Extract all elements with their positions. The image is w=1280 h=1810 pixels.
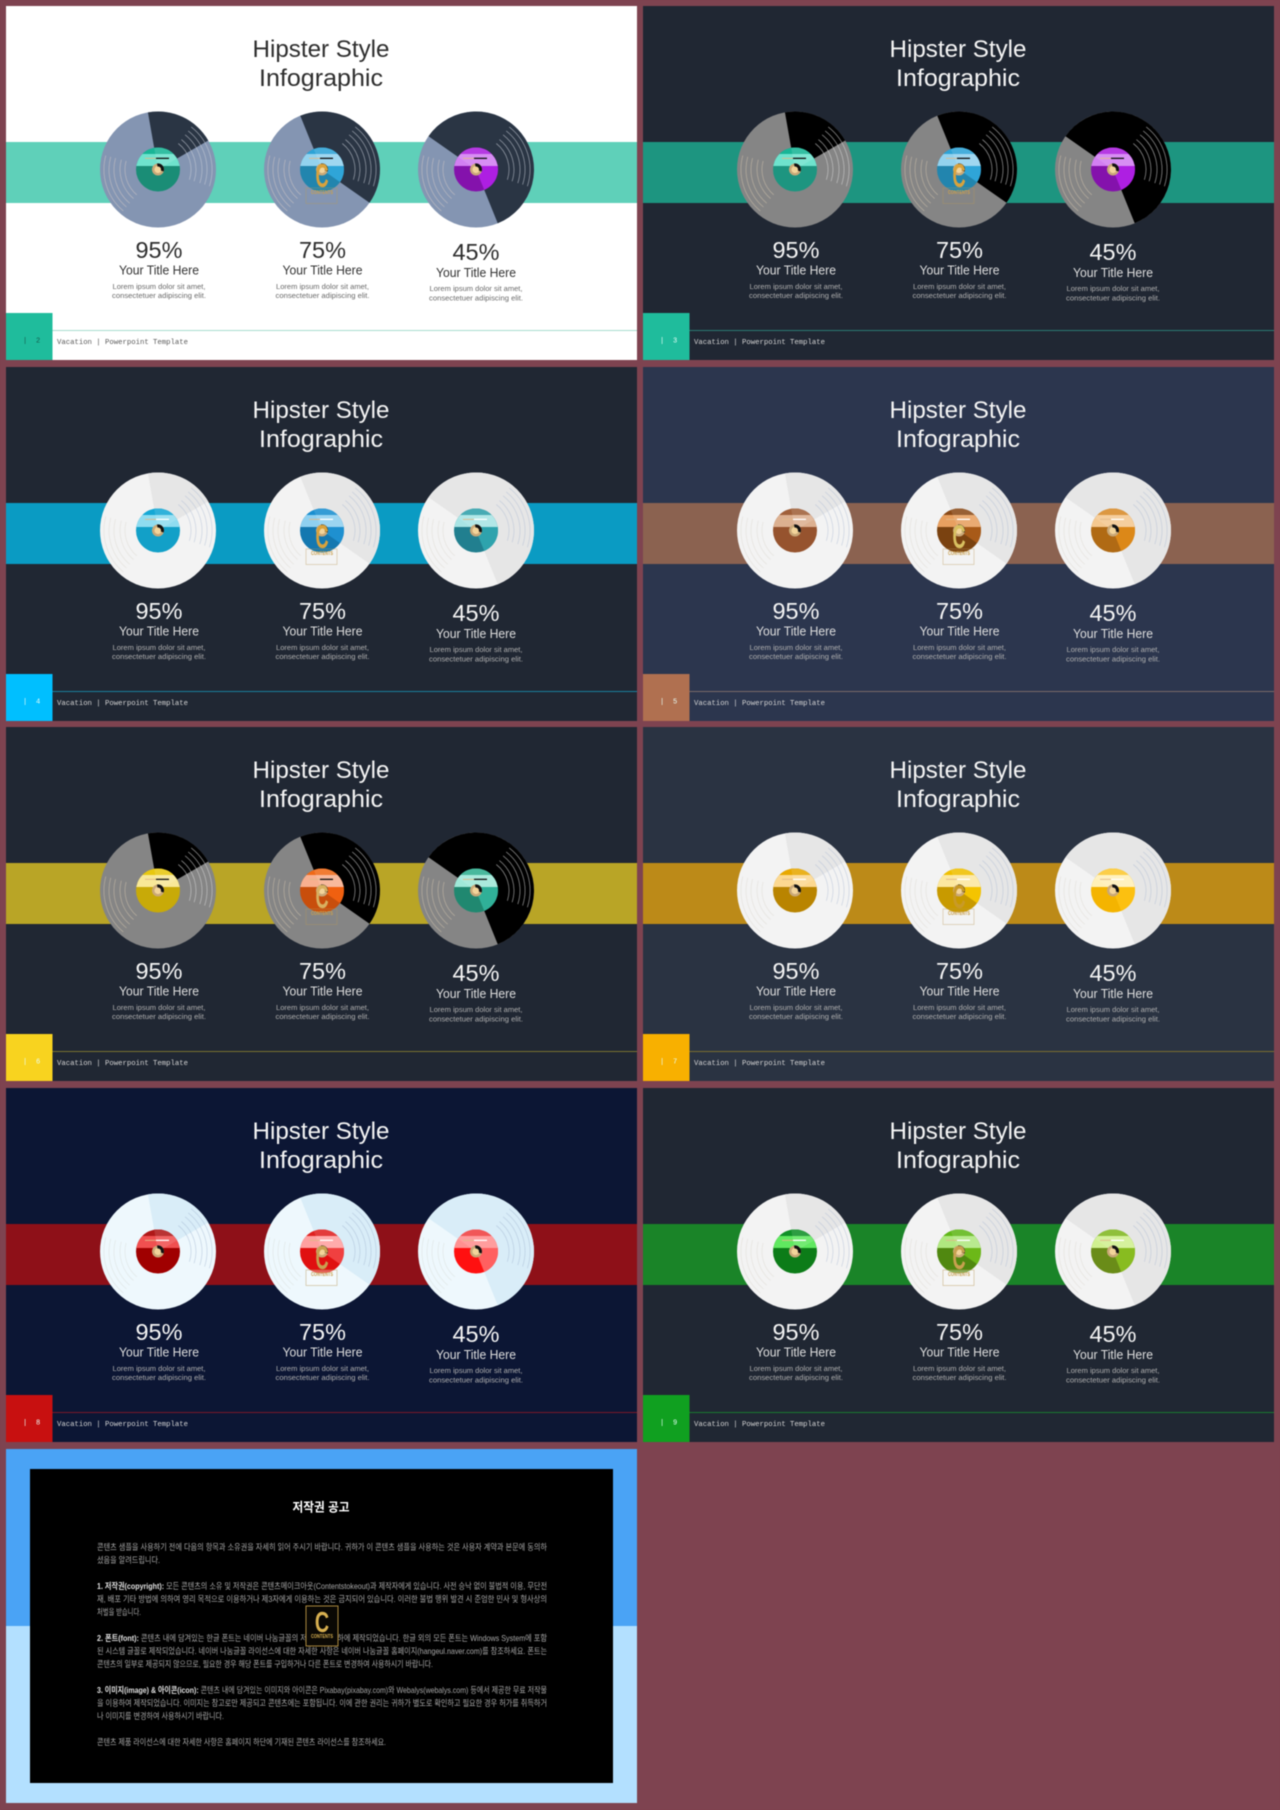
watermark logo [306,157,337,204]
stat: 95%: consectetuer adipiscing elit. [749,1373,843,1382]
colour band [643,1224,1274,1285]
stat: 45%: 45% [1090,239,1137,265]
stat: 75%: Your Title Here [282,984,362,998]
heading: Hipster Style [252,36,390,63]
stat: 45%: 45% [1090,1321,1137,1347]
panel: dark slide with olive band, page 6 [6,727,637,1081]
heading: Infographic [259,65,383,92]
watermark logo: CONTENTS [948,911,971,917]
stat: 45%: 45% [452,960,500,986]
stat: 45%: Lorem ipsum dolor sit amet, [1066,645,1160,654]
watermark logo: C [315,157,329,194]
stat: 45%: consectetuer adipiscing elit. [429,1375,523,1384]
page number square: | [23,338,27,346]
stat: 45%: 45% [1090,960,1137,986]
stat: 75%: consectetuer adipiscing elit. [912,1012,1006,1021]
stat: 45%: Your Title Here [1073,1347,1153,1362]
page number square: 2 [36,338,40,346]
vinyl record: 75% [901,1193,1017,1310]
watermark logo: C [315,1607,329,1639]
page number square [643,313,690,360]
watermark logo: C [952,878,966,915]
stat: 95%: Lorem ipsum dolor sit amet, [750,643,842,652]
stat: 45%: Lorem ipsum dolor sit amet, [430,1366,522,1375]
stat: 75% [276,237,370,300]
footer line [52,330,637,331]
stat: 75%: Your Title Here [282,624,362,638]
panel: slate slide with amber band, page 7 [643,727,1274,1081]
stat: 45%: 45% [452,600,500,626]
page number square [643,674,690,721]
vinyl record: 95% [737,1193,853,1310]
vinyl record: 75% [264,472,380,588]
stat: 45%: Lorem ipsum dolor sit amet, [430,284,522,293]
colour band [6,142,637,203]
stat: 45%: Your Title Here [1073,986,1153,1001]
heading: Hipster Style [890,397,1026,424]
vinyl record: 45% [1055,1194,1171,1310]
footer line [689,1051,1274,1052]
stat: 45%: Lorem ipsum dolor sit amet, [430,645,522,654]
notice body text: 3. 이미지(image) & 아이콘(icon): 콘텐츠 내에 담겨있는 이미지와 아이콘은 Pixabay(pixabay.com)와 Webalys(webalys.com) 등에서 제공한 무료 저작물 [97,1685,547,1695]
stat: 75%: consectetuer adipiscing elit. [276,652,370,661]
stat: 75%: Lorem ipsum dolor sit amet, [913,643,1006,652]
stat: 95%: Lorem ipsum dolor sit amet, [750,1003,842,1012]
vinyl record: 45% [1055,472,1171,588]
watermark logo: C [315,1239,329,1276]
stat: 95%: 95% [772,598,820,624]
page number square: 3 [673,338,677,346]
black notice card [30,1469,613,1783]
stat: 45%: consectetuer adipiscing elit. [1066,293,1160,302]
stat: 75%: Lorem ipsum dolor sit amet, [913,1003,1006,1012]
vinyl record: 75% [264,1193,380,1310]
stat: 45%: consectetuer adipiscing elit. [1066,1014,1160,1023]
stat: 75%: 75% [299,237,346,263]
watermark logo: CONTENTS [948,551,971,557]
stat: 45%: consectetuer adipiscing elit. [1066,654,1160,663]
heading [890,397,1026,453]
stat: 45%: 45% [452,239,500,265]
notice body text: 셨음을 알려드립니다. [97,1555,160,1565]
stat: 95% [112,958,206,1021]
stat: 95%: Lorem ipsum dolor sit amet, [112,1364,206,1373]
vinyl record: 75% [901,111,1017,228]
stat: 75%: Your Title Here [282,1344,362,1360]
footer text: Vacation | Powerpoint Template [57,339,188,347]
page number square [643,1034,690,1081]
watermark logo [943,157,974,204]
vinyl record: 95% [737,111,853,228]
footer text: Vacation | Powerpoint Template [694,1421,825,1429]
footer text: Vacation | Powerpoint Template [694,700,825,708]
heading [890,757,1026,813]
stat: 45% [1066,960,1160,1023]
panel: dark slide with teal band, page 3 [643,6,1274,360]
watermark logo: CONTENTS [311,1634,333,1640]
footer text: Vacation | Powerpoint Template [57,700,188,708]
stat: 95%: Your Title Here [756,262,836,278]
stat: 95%: Your Title Here [119,262,199,278]
stat: 95%: Lorem ipsum dolor sit amet, [750,282,842,291]
stat: 75%: Your Title Here [920,984,1000,998]
stat: 95%: 95% [136,598,183,624]
colour band [643,503,1274,564]
stat: 45%: consectetuer adipiscing elit. [429,654,523,663]
vinyl record: 95% [737,832,853,948]
page number square [643,1395,690,1442]
vinyl record: 95% [100,111,216,228]
vinyl record: 45% [418,472,534,588]
panel: dark slide with green band, page 9 [643,1088,1274,1442]
watermark logo: CONTENTS [311,551,334,557]
heading [252,397,390,453]
vinyl record: 95% [100,832,216,948]
watermark logo: C [952,1239,966,1276]
page number square: | [23,1420,27,1428]
stat: 75% [912,1319,1006,1382]
heading: Infographic [896,426,1020,453]
watermark logo [943,1239,974,1286]
vinyl record: 95% [100,1193,216,1310]
stat: 75%: Your Title Here [282,262,362,278]
footer line [689,691,1274,692]
stat: 95% [112,237,206,300]
heading [252,1118,390,1174]
stat: 95%: Lorem ipsum dolor sit amet, [112,643,206,652]
stat: 95%: consectetuer adipiscing elit. [749,291,843,300]
stat: 95%: consectetuer adipiscing elit. [112,1012,206,1021]
stat: 75%: 75% [936,237,983,263]
heading: Infographic [896,65,1020,92]
page number square: | [660,1058,664,1066]
stat: 75%: Your Title Here [920,262,1000,278]
panel: dark slide with blue band, page 4 [6,367,637,721]
vinyl record: 75% [901,472,1017,588]
stat: 45%: Your Title Here [1073,265,1153,280]
stat: 75%: 75% [299,1319,346,1345]
watermark logo: C [952,157,966,194]
heading: Infographic [259,786,383,813]
stat: 45%: consectetuer adipiscing elit. [1066,1375,1160,1384]
colour band [6,863,637,924]
heading [890,36,1026,92]
page number square: 6 [36,1058,40,1066]
footer line [52,1412,637,1413]
heading [890,1118,1026,1174]
stat: 75%: Lorem ipsum dolor sit amet, [276,1364,369,1373]
stat: 95%: consectetuer adipiscing elit. [749,652,843,661]
footer text: Vacation | Powerpoint Template [57,1421,188,1429]
stat: 45%: Your Title Here [436,265,516,280]
page number square: 7 [673,1058,677,1066]
heading: Infographic [259,426,383,453]
watermark logo [306,1606,338,1646]
panel: copyright notice [6,1449,637,1803]
panel: white slide, page 2 [6,6,637,360]
footer line [689,1412,1274,1413]
footer text: Vacation | Powerpoint Template [57,1060,188,1068]
stat: 95%: Your Title Here [119,1344,199,1360]
notice body text: 콘텐츠 샘플을 사용하기 전에 다음의 항목과 소유권을 자세히 읽어 주시기 바랍니다. 귀하가 이 콘텐츠 샘플을 사용하는 것은 사용자 계약과 본문에 동의하 [97,1542,547,1552]
vinyl record: 45% [1055,112,1171,228]
stat: 95%: consectetuer adipiscing elit. [749,1012,843,1021]
stat: 95%: Your Title Here [756,984,836,998]
stat: 75%: consectetuer adipiscing elit. [912,1373,1006,1382]
colour band [643,863,1274,924]
stat: 75%: consectetuer adipiscing elit. [912,291,1006,300]
stat: 95%: 95% [136,958,183,984]
stat: 45% [429,960,523,1023]
heading: Hipster Style [252,757,390,784]
stat: 75% [912,598,1006,661]
watermark logo [306,878,337,924]
notice body text: 처벌을 받습니다. [97,1607,141,1617]
vinyl record: 45% [418,1194,534,1310]
footer text: Vacation | Powerpoint Template [694,339,825,347]
page number square [6,674,52,721]
stat: 75%: consectetuer adipiscing elit. [276,291,370,300]
page number square [6,1395,52,1442]
vinyl record: 95% [100,472,216,588]
notice body text: 나 이미지를 변경하여 사용하시기 바랍니다. [97,1711,224,1721]
stat: 45%: Lorem ipsum dolor sit amet, [1066,284,1160,293]
vinyl record: 45% [418,112,534,228]
stat: 75%: Your Title Here [920,1344,1000,1360]
stat: 95%: 95% [772,1319,820,1345]
stat: 75% [912,958,1006,1021]
vinyl record: 95% [737,472,853,588]
page number square: | [660,338,664,346]
colour band [6,1224,637,1285]
footer line [52,1051,637,1052]
stat: 75%: Lorem ipsum dolor sit amet, [913,282,1006,291]
stat: 95%: consectetuer adipiscing elit. [112,291,206,300]
stat: 75%: 75% [936,598,983,624]
notice body text [97,1542,547,1747]
stat: 95% [112,1319,206,1382]
footer text: Vacation | Powerpoint Template [694,1060,825,1068]
stat: 75%: 75% [936,1319,983,1345]
page number square: | [23,1058,27,1066]
stat: 75% [912,237,1006,300]
stat: 75%: 75% [936,958,983,984]
footer line [52,691,637,692]
stat: 75%: consectetuer adipiscing elit. [276,1373,370,1382]
stat: 75%: 75% [299,958,346,984]
heading [252,757,390,813]
stat: 75%: Lorem ipsum dolor sit amet, [913,1364,1006,1373]
colour band [6,503,637,564]
stat: 75%: Lorem ipsum dolor sit amet, [276,643,369,652]
stat: 45%: consectetuer adipiscing elit. [429,293,523,302]
stat: 75%: consectetuer adipiscing elit. [912,652,1006,661]
stat: 95%: 95% [772,958,820,984]
watermark logo [943,518,974,564]
colour band [643,142,1274,203]
page number square: 9 [673,1420,677,1428]
notice body text: 콘텐츠 제품 라이선스에 대한 자세한 사항은 홈페이지 하단에 기재된 콘텐츠 라이선스를 참조하세요. [97,1737,386,1747]
stat: 75%: consectetuer adipiscing elit. [276,1012,370,1021]
watermark logo [306,518,337,564]
stat: 95%: Lorem ipsum dolor sit amet, [112,1003,206,1012]
page number square: 5 [673,698,677,706]
notice body text: 된 시스템 글꼴로 제작되었습니다. 네이버 나눔글꼴 라이선스에 대한 자세한 사항은 네이버 나눔글꼴 홈페이지(hangeul.naver.com)를 참조하세요. 폰트는 [97,1646,547,1656]
notice body text: 콘텐츠의 일부로 제공되지 않으므로, 필요한 경우 해당 폰트를 구입하거나 다른 폰트로 변경하여 사용하시기 바랍니다. [97,1659,433,1669]
stat: 45%: Your Title Here [436,626,516,641]
notice heading: 저작권 공고 [292,1500,350,1514]
heading: Infographic [896,1147,1020,1174]
stat: 45% [1066,239,1160,302]
panel: midnight slide with red band, page 8 [6,1088,637,1442]
watermark logo: CONTENTS [311,1272,334,1278]
stat: 45%: Your Title Here [436,1347,516,1362]
vinyl record: 45% [418,832,534,948]
stat: 75%: Your Title Here [920,624,1000,638]
notice body text: 을 이용하여 제작되었습니다. 이미지는 참고로만 제공되고 콘텐츠에는 포함됩니다. 이에 관한 권리는 귀하가 별도로 확인하고 필요한 경우 허가를 취득하거 [97,1698,547,1708]
notice body text: 2. 폰트(font): 콘텐츠 내에 담겨있는 한글 폰트는 네이버 나눔글꼴의 저작권 허락 하에 제작되었습니다. 한글 외의 모든 폰트는 Windows System에 포함 [97,1633,547,1643]
page number square [6,313,52,360]
page number square: | [660,1420,664,1428]
page number square [6,1034,52,1081]
stat: 75% [276,958,370,1021]
stat: 45%: Lorem ipsum dolor sit amet, [1066,1366,1160,1375]
stat: 95% [749,1319,843,1382]
stat: 95%: Your Title Here [119,624,199,638]
stat: 95%: Lorem ipsum dolor sit amet, [112,282,206,291]
heading: Hipster Style [890,1118,1026,1145]
page number square: | [23,698,27,706]
page number square: | [660,698,664,706]
page number square: 4 [36,698,40,706]
footer line [689,330,1274,331]
stat: 75%: 75% [299,598,346,624]
vinyl record: 45% [1055,832,1171,948]
stat: 95%: Your Title Here [756,624,836,638]
stat: 95%: Your Title Here [756,1344,836,1360]
stat: 75%: Lorem ipsum dolor sit amet, [276,282,369,291]
vinyl record: 75% [264,111,380,228]
stat: 95%: 95% [136,1319,183,1345]
watermark logo: C [315,518,329,555]
notice body text: 재, 배포 기타 방법에 의하여 영리 목적으로 이용하거나 제3자에게 이용하는 것은 금지되어 있습니다. 이러한 불법 행위 발견 시 준엄한 민사 및 형사상의 [97,1594,547,1604]
stat: 45% [429,600,523,663]
heading: Infographic [259,1147,383,1174]
stat: 45% [429,239,523,302]
vinyl record: 75% [264,832,380,948]
heading: Hipster Style [890,757,1026,784]
stat: 95%: 95% [772,237,820,263]
stat: 45% [1066,600,1160,663]
watermark logo: CONTENTS [311,911,334,917]
heading: Hipster Style [890,36,1026,63]
stat: 75%: Lorem ipsum dolor sit amet, [276,1003,369,1012]
vinyl record: 75% [901,832,1017,948]
heading: Infographic [896,786,1020,813]
stat: 95%: 95% [136,237,183,263]
stat: 95%: Your Title Here [119,984,199,998]
watermark logo [306,1239,337,1286]
watermark logo [943,878,974,924]
stat: 75% [276,598,370,661]
stat: 45%: Lorem ipsum dolor sit amet, [430,1005,522,1014]
stat: 45%: Lorem ipsum dolor sit amet, [1066,1005,1160,1014]
watermark logo: C [952,518,966,555]
stat: 95% [749,598,843,661]
stat: 45%: Your Title Here [1073,626,1153,641]
page number square: 8 [36,1420,40,1428]
watermark logo: CONTENTS [948,190,971,196]
stat: 45%: Your Title Here [436,986,516,1001]
stat: 45% [1066,1321,1160,1384]
heading: Hipster Style [252,1118,390,1145]
notice body text: 1. 저작권(copyright): 모든 콘텐츠의 소유 및 저작권은 콘텐츠메이크아웃(Contentstokeout)과 제작자에게 있습니다. 사전 승낙 없이 불법적 이용, 무단전 [97,1581,547,1591]
watermark logo: CONTENTS [311,190,334,196]
stat: 45% [429,1321,523,1384]
stat: 95% [112,598,206,661]
stat: 95%: Lorem ipsum dolor sit amet, [750,1364,842,1373]
stat: 95% [749,958,843,1021]
watermark logo: C [315,878,329,915]
stat: 45%: 45% [452,1321,500,1347]
stat: 45%: consectetuer adipiscing elit. [429,1014,523,1023]
stat: 45%: 45% [1090,600,1137,626]
stat: 75% [276,1319,370,1382]
heading: Hipster Style [252,397,390,424]
watermark logo: CONTENTS [948,1272,971,1278]
heading [252,36,390,92]
panel: navy slide with brown band, page 5 [643,367,1274,721]
stat: 95%: consectetuer adipiscing elit. [112,652,206,661]
stat: 95%: consectetuer adipiscing elit. [112,1373,206,1382]
stat: 95% [749,237,843,300]
